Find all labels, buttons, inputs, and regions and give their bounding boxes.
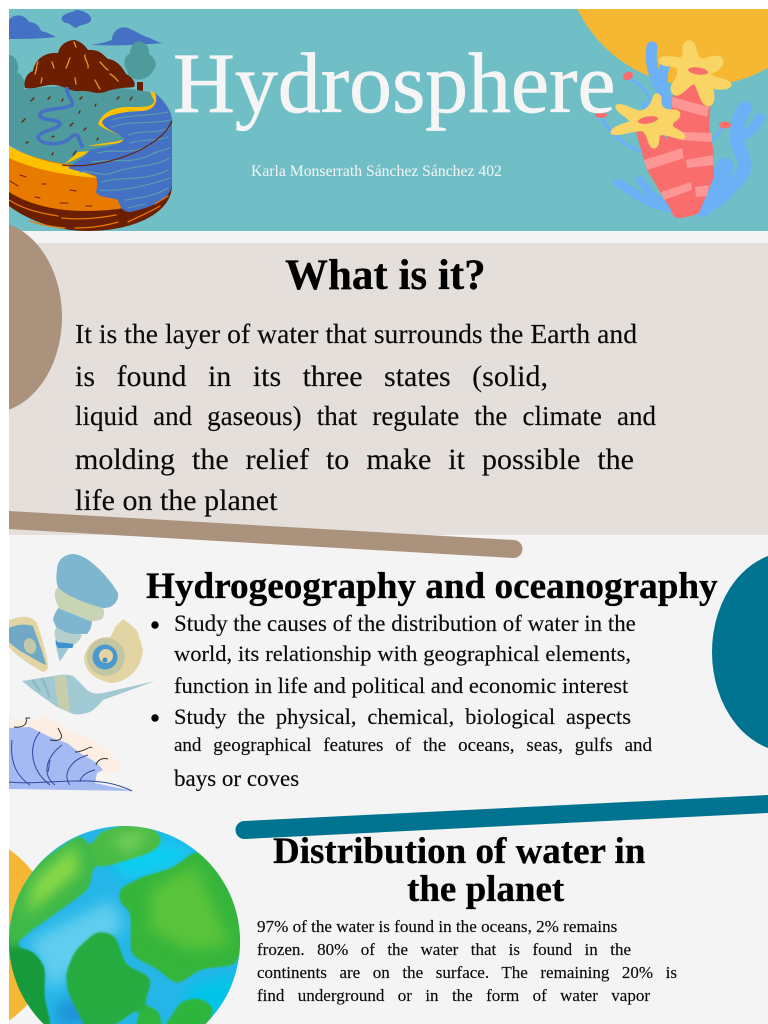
base layer bbox=[9, 185, 172, 231]
light green highlights bbox=[25, 832, 230, 950]
text block: distribution facts: find underground or in the form of water vapor bbox=[257, 986, 650, 1005]
ocean bbox=[68, 93, 172, 212]
orange layer bbox=[9, 146, 125, 211]
nautilus shell bbox=[84, 619, 143, 683]
mountains bbox=[24, 40, 135, 93]
text block: bullet list: Study the physical, chemical, biological aspects bbox=[174, 704, 631, 729]
starfish lower bbox=[612, 95, 684, 147]
text block: definition bbox=[75, 318, 656, 517]
text block: definition: molding the relief to make it possible the bbox=[75, 443, 634, 476]
decorative orange sun bbox=[578, 9, 768, 84]
seaweed bbox=[602, 47, 760, 208]
heading: what is it: What is it? bbox=[285, 252, 486, 299]
panel: header banner bbox=[9, 9, 768, 231]
icon: earth cross-section island bbox=[9, 10, 172, 231]
star centres and pods bbox=[595, 66, 731, 128]
spiral shell bbox=[53, 554, 118, 660]
text block: definition: life on the planet bbox=[75, 484, 277, 517]
ocean wave bbox=[9, 716, 133, 791]
text block: bullet list: Study the causes of the distribution of water in the bbox=[174, 611, 636, 636]
rim line bbox=[62, 121, 172, 166]
clouds bbox=[9, 10, 164, 45]
icon: coral and starfish bbox=[595, 42, 760, 218]
continents bbox=[0, 825, 245, 1024]
starfish upper bbox=[660, 42, 730, 105]
soil ticks bbox=[22, 97, 132, 155]
trees bbox=[9, 41, 156, 92]
text block: bullet list: bays or coves bbox=[174, 766, 299, 791]
text block: distribution facts bbox=[257, 917, 677, 1005]
heading: distribution of water: the planet bbox=[407, 869, 564, 910]
coral tall stem bbox=[664, 75, 714, 218]
coral stripes bbox=[644, 97, 714, 200]
page background bbox=[9, 231, 768, 1024]
text block: bullet list: function in life and political and economic interest bbox=[174, 673, 628, 698]
text block: definition: is found in its three states (solid, bbox=[75, 360, 548, 393]
base strata bbox=[9, 196, 168, 228]
top surface bbox=[9, 86, 172, 166]
ocean ripples bbox=[80, 112, 170, 208]
text block: bullet list: world, its relationship with geographical elements, bbox=[174, 641, 631, 666]
text block: bullet list: and geographical features of the oceans, seas, gulfs and bbox=[174, 735, 652, 756]
light water patches bbox=[30, 830, 240, 1024]
cone shell bbox=[9, 617, 48, 672]
bullet markers bbox=[151, 621, 159, 722]
decorative brown half circle bbox=[9, 224, 62, 410]
beach bbox=[64, 91, 157, 164]
text block: bullet list bbox=[174, 611, 652, 792]
text block: distribution facts: 97% of the water is found in the oceans, 2% remains bbox=[257, 917, 617, 936]
heading: distribution of water bbox=[273, 831, 646, 910]
yellow layer bbox=[9, 146, 97, 178]
decorative teal half circle bbox=[712, 552, 768, 752]
decorative brown bar bbox=[9, 511, 523, 558]
text block: distribution facts: continents are on the surface. The remaining 20% is bbox=[257, 963, 677, 982]
coral short stem bbox=[636, 127, 699, 218]
title: Hydrosphere bbox=[173, 36, 616, 131]
text block: distribution facts: frozen. 80% of the water that is found in the bbox=[257, 940, 631, 959]
heading: hydrogeography and oceanography: Hydrogeography and oceanography bbox=[146, 566, 718, 607]
text block: definition: It is the layer of water that surrounds the Earth and bbox=[75, 318, 637, 349]
panel: what is it bbox=[9, 243, 768, 535]
decorative orange circle bottom bbox=[9, 849, 32, 1021]
long conch shell bbox=[22, 675, 155, 714]
heading: distribution of water: Distribution of water in bbox=[273, 831, 645, 872]
decorative teal bar bbox=[235, 795, 768, 839]
text block: definition: liquid and gaseous) that regulate the climate and bbox=[75, 401, 656, 431]
author subtitle: Karla Monserrath Sánchez Sánchez 402 bbox=[251, 163, 502, 180]
icon: watercolor globe bbox=[0, 824, 245, 1024]
river bbox=[38, 87, 83, 148]
icon: sea shells bbox=[9, 554, 155, 791]
